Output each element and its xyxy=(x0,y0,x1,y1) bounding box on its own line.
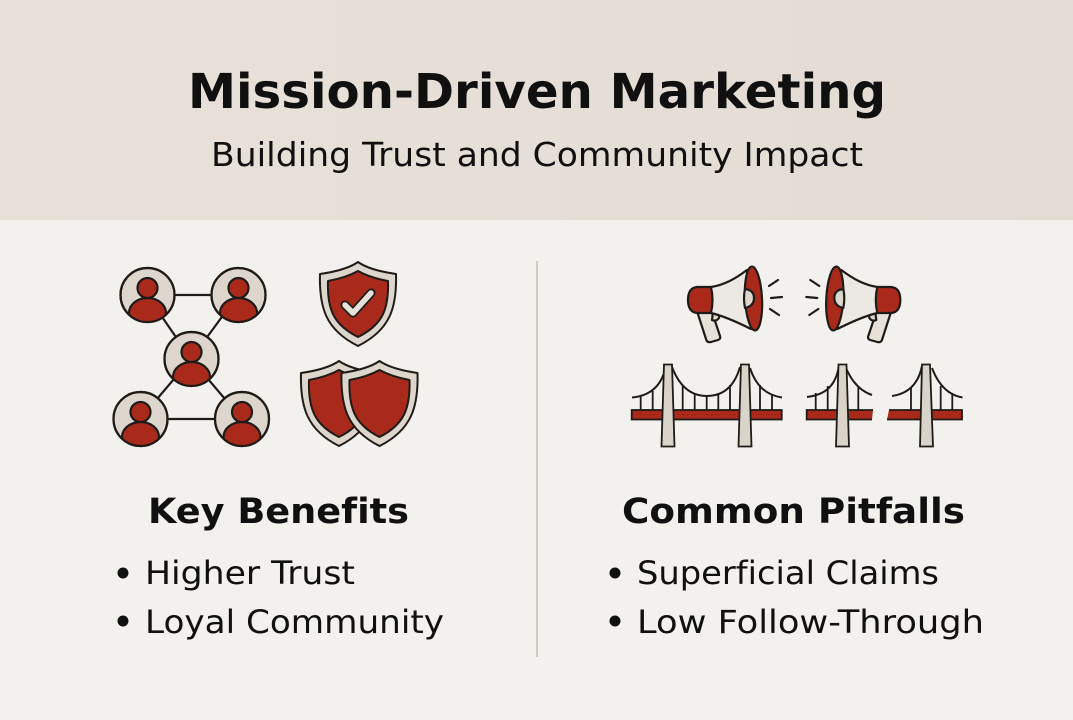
list: benefits: Loyal Community xyxy=(145,603,444,641)
panel: common pitfalls xyxy=(610,266,984,641)
list: pitfalls xyxy=(610,554,984,641)
icon: broken bridge xyxy=(807,364,962,446)
heading: common pitfalls: Common Pitfalls xyxy=(622,492,965,532)
icon: shield with check xyxy=(320,262,396,346)
front shield xyxy=(341,361,418,446)
list: benefits xyxy=(118,554,444,641)
heading: key benefits: Key Benefits xyxy=(148,492,409,532)
icon: megaphone right xyxy=(806,266,900,342)
subtitle: Building Trust and Community Impact xyxy=(211,135,863,174)
person node 4 xyxy=(114,392,168,452)
icon: megaphone left xyxy=(688,266,782,342)
person node 5 xyxy=(215,392,269,452)
panel: key benefits xyxy=(114,262,444,641)
list: pitfalls: Low Follow-Through xyxy=(637,603,984,641)
person node 1 xyxy=(120,268,174,328)
icon: overlapping shields xyxy=(301,361,418,446)
list: benefits: Higher Trust xyxy=(145,554,355,592)
icon: community network xyxy=(114,268,269,452)
person node 3 xyxy=(164,332,218,392)
icon: intact bridge xyxy=(632,364,782,446)
person node 2 xyxy=(212,268,266,328)
title: Mission-Driven Marketing xyxy=(188,64,886,120)
back shield xyxy=(301,361,377,446)
header band xyxy=(0,0,1073,220)
list: pitfalls: Superficial Claims xyxy=(637,554,939,592)
